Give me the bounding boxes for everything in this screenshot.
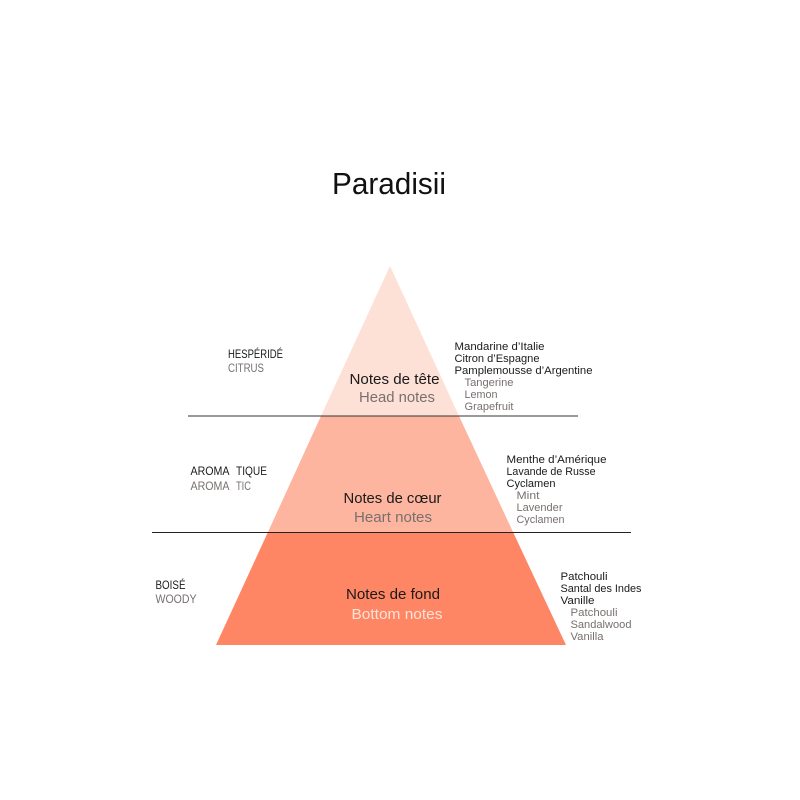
pyramid tier: heart notes — [268, 416, 513, 532]
ingredients: heart notes: Lavande de Russe — [506, 466, 596, 478]
ingredients: heart notes: Menthe d’Amérique — [506, 454, 606, 466]
pyramid tier: head notes — [321, 266, 459, 416]
ingredients: head notes: Citron d’Espagne — [454, 353, 540, 365]
ingredients: heart notes: Cyclamen — [506, 478, 556, 490]
label: bottom notes: Notes de fond — [346, 586, 440, 603]
ingredients: head notes — [454, 341, 592, 413]
family: woody: WOODY — [156, 592, 196, 606]
family: woody: BOISÉ — [156, 577, 186, 592]
label: heart notes: Heart notes — [354, 509, 432, 526]
pyramid tier: bottom notes — [216, 532, 566, 645]
ingredients: head notes: Pamplemousse d’Argentine — [454, 365, 592, 377]
title: Paradisii — [332, 166, 446, 201]
ingredients: bottom notes: Sandalwood — [570, 619, 632, 631]
label: heart notes: Notes de cœur — [344, 490, 442, 507]
ingredients: heart notes — [506, 454, 606, 526]
family: aromatic: TIC — [236, 479, 251, 493]
label: bottom notes — [346, 586, 442, 623]
label: head notes: Notes de tête — [350, 371, 440, 388]
label: head notes: Head notes — [359, 389, 435, 406]
ingredients: heart notes: Mint — [516, 490, 540, 502]
ingredients: head notes: Lemon — [464, 389, 498, 401]
label: head notes — [350, 371, 440, 406]
divider line: head and heart — [188, 415, 578, 417]
divider line: heart and bottom — [152, 532, 631, 534]
family: aromatic — [190, 464, 267, 493]
family: aromatic: TIQUE — [236, 464, 267, 478]
family: woody — [156, 577, 196, 606]
ingredients: heart notes: Cyclamen — [516, 514, 564, 526]
ingredients: heart notes: Lavender — [516, 502, 563, 514]
family: citrus: CITRUS — [228, 361, 264, 375]
ingredients: bottom notes: Patchouli — [570, 607, 618, 619]
ingredients: bottom notes: Patchouli — [560, 571, 608, 583]
ingredients: bottom notes: Santal des Indes — [560, 583, 642, 595]
family: citrus: HESPÉRIDÉ — [228, 346, 283, 361]
ingredients: bottom notes — [560, 571, 642, 643]
label: bottom notes: Bottom notes — [352, 606, 442, 623]
family: citrus — [228, 346, 283, 375]
ingredients: bottom notes: Vanilla — [570, 631, 604, 643]
label: heart notes — [344, 490, 442, 526]
pyramid chart — [216, 266, 566, 645]
ingredients: head notes: Tangerine — [464, 377, 514, 389]
ingredients: head notes: Grapefruit — [464, 401, 514, 413]
ingredients: head notes: Mandarine d’Italie — [454, 341, 544, 353]
ingredients: bottom notes: Vanille — [560, 595, 594, 607]
family: aromatic: AROMA — [190, 464, 230, 478]
family: aromatic: AROMA — [190, 479, 230, 493]
